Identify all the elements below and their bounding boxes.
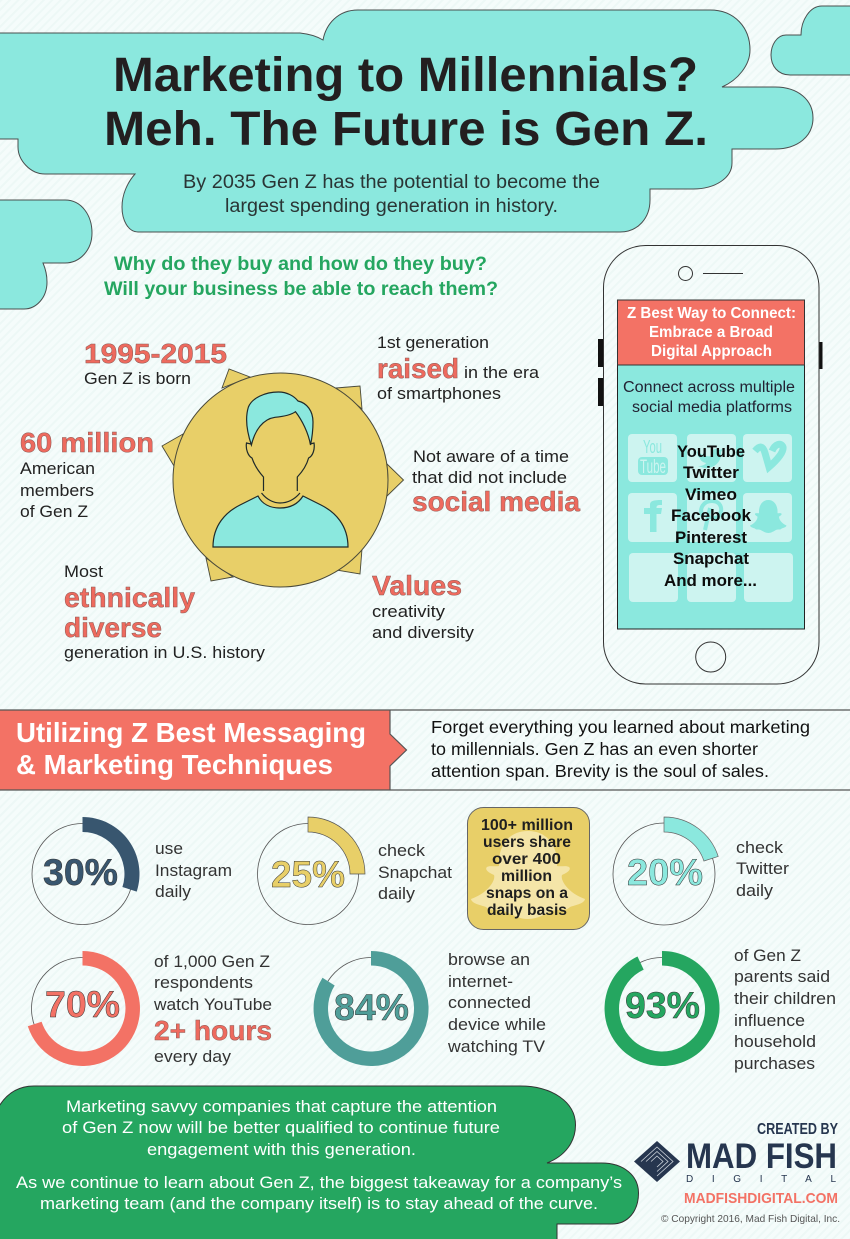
- stat: 93% parents: influence: [734, 1012, 805, 1030]
- phone red header: Embrace a Broad: [649, 324, 773, 341]
- stat: 70% YouTube: watch YouTube: [153, 996, 272, 1014]
- callout: snapchat users: daily basis: [487, 902, 567, 919]
- fact: 60 million: 60 million: [20, 427, 154, 458]
- subtitle: [183, 172, 600, 217]
- callout: snapchat users: [468, 808, 590, 930]
- closing text: of Gen Z now will be better qualified to continue future: [62, 1119, 500, 1137]
- green question heading: [104, 254, 498, 300]
- icon: maze diamond: [634, 1141, 680, 1182]
- platform list: And more...: [664, 572, 757, 590]
- logo: Mad Fish Digital: © Copyright 2016, Mad Fish Digital, Inc.: [661, 1213, 840, 1225]
- platform list: [664, 443, 757, 590]
- phone intro text: social media platforms: [632, 399, 792, 416]
- phone red header: [618, 300, 804, 365]
- stat: 25% Snapchat: daily: [378, 885, 416, 903]
- stat: 30% Instagram: [32, 817, 232, 924]
- fact: values: Values: [372, 570, 462, 601]
- icon: vimeo: [755, 444, 783, 467]
- icon: snapchat ghost: [471, 831, 585, 919]
- banner text: [431, 717, 810, 781]
- fact: born: [84, 338, 227, 388]
- left cloud: [0, 200, 92, 309]
- title: [104, 49, 708, 156]
- icon: pinterest: [701, 501, 721, 530]
- stat: 70% YouTube: of 1,000 Gen Z: [154, 953, 270, 971]
- stat: 70% YouTube: every day: [154, 1048, 232, 1066]
- green question heading: Will your business be able to reach them?: [104, 279, 498, 300]
- fact: social media: Not aware of a time: [413, 448, 569, 466]
- stat: 93% parents: household: [734, 1033, 816, 1051]
- stat: 70% YouTube: 2+ hours: [154, 1015, 272, 1046]
- subtitle: largest spending generation in history.: [225, 196, 558, 217]
- banner text: to millennials. Gen Z has an even shorter: [431, 739, 758, 759]
- closing text: [16, 1098, 622, 1213]
- stat: 93% parents: purchases: [734, 1055, 815, 1073]
- fact: ethnically diverse: generation in U.S. history: [64, 644, 266, 662]
- icon: person: [213, 392, 348, 547]
- stat: 93% parents: [605, 947, 836, 1073]
- callout: snapchat users: users share: [483, 834, 571, 851]
- stat: 20% Twitter: check: [736, 839, 784, 857]
- callout: snapchat users: 100+ million: [481, 817, 573, 834]
- callout: snapchat users: million: [501, 868, 552, 885]
- subtitle: By 2035 Gen Z has the potential to become the: [183, 172, 600, 193]
- icon: youtube: You: [643, 437, 662, 457]
- platform list: Facebook: [671, 507, 752, 525]
- fact: 60 million: [20, 427, 154, 521]
- stat: 93% parents: parents said: [734, 968, 830, 986]
- social app tiles: [628, 434, 793, 602]
- fact: 60 million: American: [20, 460, 95, 478]
- fact: ethnically diverse: ethnically: [64, 582, 195, 613]
- stat: 25% Snapchat: [258, 817, 452, 924]
- stat: 84% TV: watching TV: [447, 1038, 545, 1056]
- fact: 60 million: members: [20, 482, 94, 500]
- fact: raised with smartphones: in the era: [464, 364, 540, 382]
- stat: 25% Snapchat: 25%: [271, 854, 345, 895]
- banner text: attention span. Brevity is the soul of sales.: [431, 761, 769, 781]
- sun badge with person icon: [162, 369, 404, 587]
- stat: 20% Twitter: 20%: [627, 852, 703, 893]
- fact: born: 1995-2015: [84, 338, 227, 369]
- fact: raised with smartphones: 1st generation: [377, 334, 489, 352]
- stat: 70% YouTube: 70%: [45, 984, 120, 1025]
- phone intro text: [623, 379, 795, 416]
- platform list: YouTube: [677, 443, 745, 461]
- phone intro text: Connect across multiple: [623, 379, 795, 396]
- stat: 30% Instagram: Instagram: [155, 862, 232, 880]
- fact: ethnically diverse: diverse: [64, 612, 162, 643]
- icon: facebook: [644, 500, 662, 532]
- banner: messaging heading: [0, 710, 850, 790]
- fact: social media: social media: [412, 486, 580, 517]
- fact: values: creativity: [372, 603, 446, 621]
- top right cloud: [771, 6, 850, 75]
- closing text: engagement with this generation.: [147, 1141, 416, 1159]
- phone red header: Digital Approach: [651, 343, 772, 360]
- logo: Mad Fish Digital: [634, 1121, 840, 1225]
- stat: 30% Instagram: 30%: [43, 852, 118, 893]
- fact: born: Gen Z is born: [84, 370, 191, 388]
- fact: raised with smartphones: [377, 334, 540, 403]
- fact: ethnically diverse: Most: [64, 563, 103, 581]
- title: Meh. The Future is Gen Z.: [104, 103, 708, 156]
- fact: raised with smartphones: of smartphones: [377, 385, 501, 403]
- stat: 93% parents: their children: [734, 990, 836, 1008]
- fact: ethnically diverse: [64, 563, 266, 662]
- title: Marketing to Millennials?: [113, 49, 698, 102]
- logo: Mad Fish Digital: MADFISHDIGITAL.COM: [684, 1190, 838, 1207]
- banner: messaging heading: Utilizing Z Best Messaging: [16, 717, 366, 748]
- stat: 20% Twitter: daily: [736, 882, 774, 900]
- stat: 20% Twitter: [613, 817, 790, 925]
- stat: 70% YouTube: respondents: [154, 974, 253, 992]
- icon: youtube: Tube: [640, 457, 666, 478]
- stat: 93% parents: 93%: [625, 985, 700, 1026]
- stat: 84% TV: device while: [448, 1016, 546, 1034]
- stat: 20% Twitter: Twitter: [736, 860, 790, 878]
- icon: youtube: [638, 437, 668, 478]
- header cloud: [0, 10, 813, 232]
- stat: 70% YouTube: [28, 951, 272, 1066]
- green closing cloud: [0, 1086, 638, 1239]
- closing text: Marketing savvy companies that capture the attention: [66, 1098, 497, 1116]
- icon: snapchat: [750, 500, 786, 533]
- fact: values: [372, 570, 475, 642]
- closing text: As we continue to learn about Gen Z, the biggest takeaway for a company’s: [16, 1174, 622, 1192]
- stat: 84% TV: connected: [448, 994, 531, 1012]
- platform list: Twitter: [683, 464, 740, 482]
- phone red header: Z Best Way to Connect:: [627, 305, 796, 322]
- fact: values: and diversity: [372, 624, 475, 642]
- stat: 93% parents: of Gen Z: [734, 947, 801, 965]
- stat: 25% Snapchat: Snapchat: [378, 864, 452, 882]
- stat: 30% Instagram: daily: [155, 883, 192, 901]
- platform list: Pinterest: [675, 529, 748, 547]
- fact: raised with smartphones: raised: [377, 353, 459, 384]
- closing text: marketing team (and the company itself) is to stay ahead of the curve.: [40, 1195, 598, 1213]
- stat: 25% Snapchat: check: [378, 842, 426, 860]
- fact: 60 million: of Gen Z: [20, 503, 88, 521]
- stat: 84% TV: [314, 951, 546, 1066]
- green question heading: Why do they buy and how do they buy?: [114, 254, 487, 275]
- platform list: Vimeo: [685, 486, 737, 504]
- banner: messaging heading: & Marketing Techniques: [16, 749, 333, 780]
- callout: snapchat users: over 400: [492, 851, 561, 868]
- fact: social media: [412, 448, 580, 517]
- callout: snapchat users: snaps on a: [486, 885, 568, 902]
- icon: twitter: [697, 449, 723, 468]
- stat: 84% TV: browse an: [448, 951, 530, 969]
- stat: 30% Instagram: use: [155, 840, 183, 858]
- stat: 84% TV: internet-: [448, 973, 513, 991]
- logo: Mad Fish Digital: DIGITAL: [686, 1174, 836, 1185]
- phone panel: [598, 246, 822, 684]
- fact: social media: that did not include: [412, 469, 567, 487]
- stat: 84% TV: 84%: [334, 987, 409, 1028]
- platform list: Snapchat: [673, 550, 750, 568]
- banner text: Forget everything you learned about marketing: [431, 717, 810, 737]
